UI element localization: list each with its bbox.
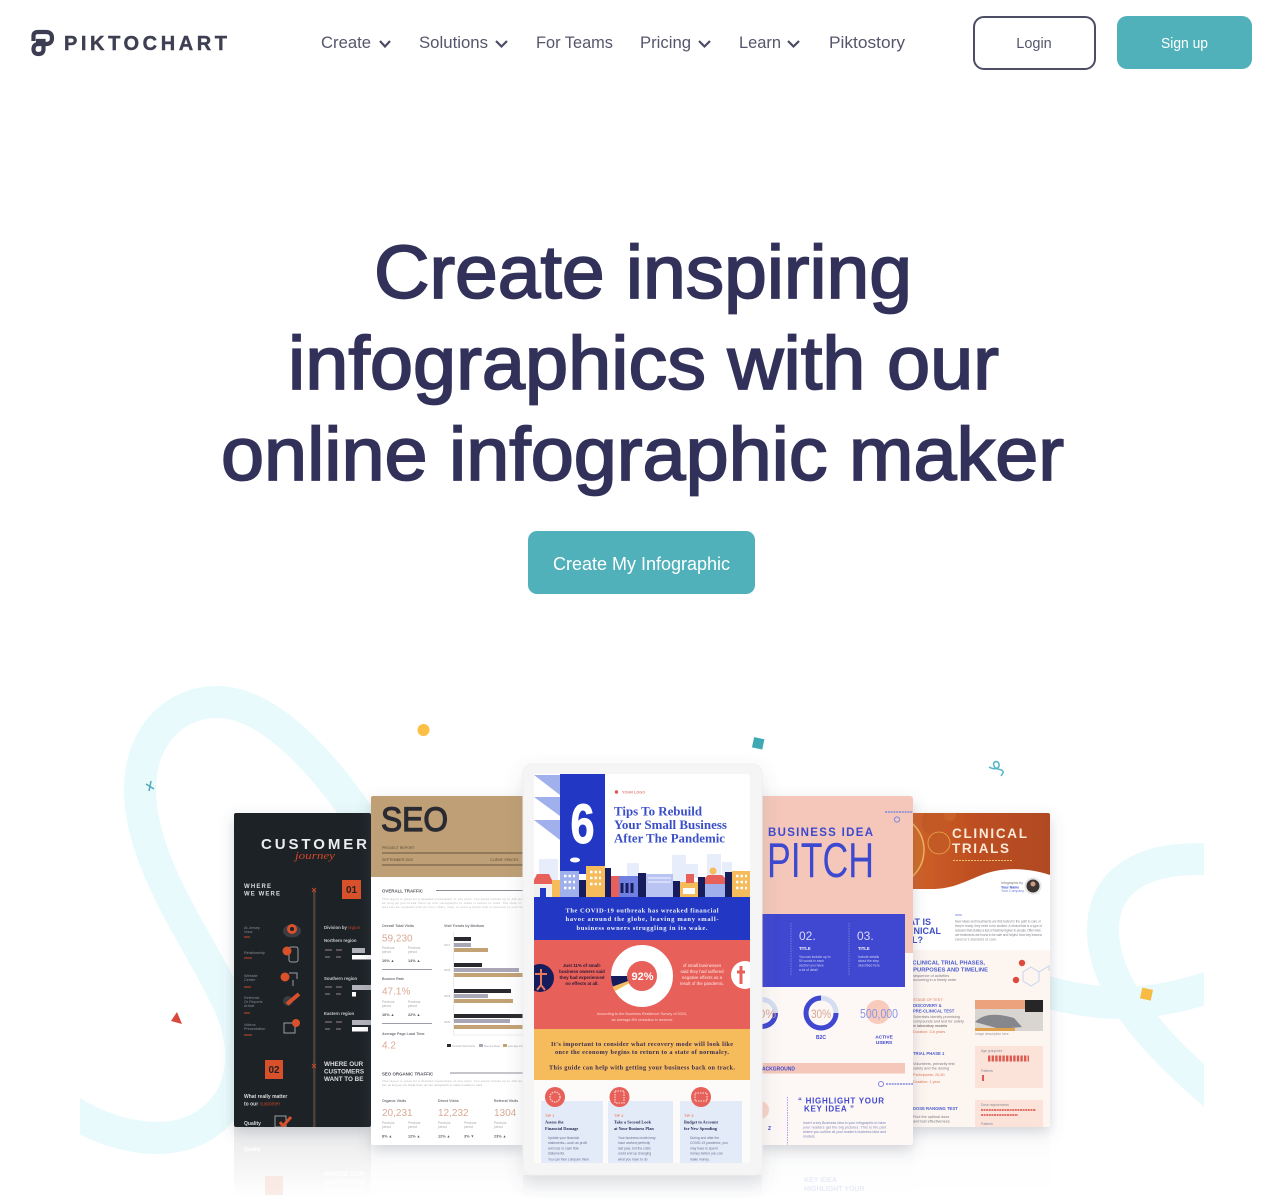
source note: According to the Business Resilience Survey of 2020, [597,1012,687,1016]
tip card 2: Take a Second Look [614,1120,652,1124]
header: tan banner: CLIENT: SPACEX [490,858,519,862]
section: yellow message [534,1029,750,1080]
panel: centre frame [523,764,762,1175]
stat: active users: 500,000 [860,1007,898,1021]
nav link: Pricing: Pricing [640,33,691,52]
section: SEO organic traffic: 1304 [494,1108,517,1119]
tip card 1: You can then compare them [548,1158,589,1162]
text: phases list: compounds and test for safety [913,1020,964,1024]
text: what really matter: Quality [244,1121,261,1127]
heading: what is a clinical trial: WHAT IS [894,917,931,927]
reflection: dark card: WANT TO BE [324,1187,365,1194]
chart legend: Average Page [508,1044,526,1048]
text: phases list: Duration: 1 year [913,1080,941,1084]
chart: dose requirements: Dose requirements [981,1103,1009,1107]
bar chart: visit trends by medium [444,924,526,1048]
section: overall traffic: as long as you break them up into paragraphs to make it easier to read. The dots in this [382,901,528,905]
tip card 3: may have to spend [690,1146,718,1150]
heading: tips to rebuild [614,804,727,846]
text: left statistic: they had experienced [560,975,605,980]
metrics: overall visits, bounce rate, load time: Previous [408,1000,421,1004]
tip card 3: money before you can [690,1152,723,1156]
logo [34,32,227,55]
title: online infographic maker [221,412,1064,496]
panel: clinical trials card [913,812,1056,1138]
nav link: For Teams: For Teams [536,33,613,52]
icon: teal plus [146,781,154,791]
text: left statistic: Just 11% of small- [563,963,602,968]
chart legend: Bounce Rate [484,1044,501,1048]
chart: participants pictogram: Patients [981,1069,993,1073]
stat: active users: USERS [876,1040,893,1046]
left accent [751,1101,771,1132]
metrics: overall visits, bounce rate, load time: Previous [382,946,395,950]
section: tip cards [534,1080,750,1163]
tip card 1: statements. [548,1152,565,1156]
heading: where we were: WHERE [244,884,271,890]
text: left statistic [559,963,605,986]
text: phases list: sequence of activities [913,974,949,978]
metrics: overall visits, bounce rate, load time: Bounce Rate [382,977,404,981]
badge: 02: 02 [268,1065,280,1076]
banner triangles [534,775,560,840]
chart: left donut: 30% [752,1007,776,1021]
section: intro [534,897,750,940]
section: SEO organic traffic: 20,231 [382,1108,413,1119]
tip card 2: TIP 2 [614,1113,624,1118]
list: journey stages: Center [244,978,256,982]
text: left statistic: no effects at all. [565,981,599,986]
text: phases list: Duration: 3-6 years [913,1030,945,1034]
tip card 2: have worked perfectly [618,1141,650,1145]
metrics: overall visits, bounce rate, load time: period [408,950,417,954]
chart: participants pictogram: Age group/sex [981,1049,1003,1053]
tip card 1 [541,1087,603,1163]
section: SEO organic traffic: Previous [408,1121,421,1125]
author credit [1001,878,1042,894]
sign up button [1117,16,1252,69]
nav link: Create: Create [321,33,371,52]
tip card 1: and loss or cash flow [548,1146,579,1150]
metrics: overall visits, bounce rate, load time: 16% ▲ [382,1013,394,1017]
bars: regional metrics [325,948,371,1032]
text: what really matter: to our customer [244,1102,280,1108]
text: phases list: PRE-CLINICAL TEST [913,1008,955,1014]
text: division by region [324,925,361,1016]
panel: blue steps: 02. [799,929,816,943]
chart: B2C donut: 30% [811,1007,831,1021]
title: infographics with our [288,321,999,405]
list: journey stages: Website [244,974,258,978]
tip card 1: statements—such as profit [548,1141,587,1145]
text: phases list: Scientists identify promising [913,1015,960,1019]
list: journey stages: Or Reports [244,1000,263,1004]
text: division by region: Eastern region [324,1011,354,1016]
nav link: Learn: Learn [739,33,781,52]
title: Create inspiring [374,230,912,314]
quote: highlight your key idea: models. [803,1134,816,1138]
icon: molecule and virus [1013,960,1049,986]
text: description [955,915,1042,942]
author credit: Your Name [1001,886,1019,890]
tip card 2: at Your Business Plan [614,1126,654,1131]
section: SEO organic traffic [382,1072,528,1138]
icon: navy person [526,964,554,992]
source note [597,1012,687,1022]
chart: B2C donut: B2C [816,1035,826,1041]
metrics: overall visits, bounce rate, load time: Previous [382,1000,395,1004]
icon: yellow dot [418,724,430,736]
donut chart: 92 percent [619,953,665,999]
heading: where our customers want to be [324,1062,364,1081]
heading: where our customers want to be: CUSTOMERS [324,1068,364,1076]
bar chart: visit trends by medium: 2018 [444,968,451,972]
section: SEO organic traffic: 12,232 [438,1108,469,1119]
reflection: clinical card [913,1127,1050,1198]
logo tag: YOUR LOGO [622,790,645,794]
call to action button [528,531,755,594]
icon: yellow square [1140,988,1153,1001]
panel: blue steps: 03. [857,929,874,943]
text: phases list: in laboratory models [913,1024,947,1028]
text: description: research that studies a test or treatment given to people. Often here [955,928,1041,932]
list: journey stages: Article [244,1004,255,1008]
text: phases list: safety and the dosing [913,1066,949,1070]
tip card 3: make money. [690,1158,710,1162]
metrics: overall visits, bounce rate, load time: Previous [408,946,421,950]
quote: highlight your key idea: where you outline all your reader's business idea and [803,1130,886,1134]
pale skyline [539,854,732,897]
panel: blue steps: 50 words in each [799,959,824,963]
icon: white person [731,961,759,989]
quote: highlight your key idea: Insert a key Business idea in your infographic to have [803,1121,886,1125]
panel: blue steps: Include details [858,955,879,959]
heading: what is a clinical trial: CLINICAL [899,926,941,936]
text: phases list: Participants: 20-80 [913,1073,945,1077]
metrics: overall visits, bounce rate, load time: Overall Total Visits [382,924,414,928]
logo wordmark: PIKTOCHART [64,33,227,55]
heading: what is a clinical trial [913,918,941,943]
reflections beneath cards [234,1127,1050,1198]
heading: phases and timeline [913,960,988,972]
heading: customer journey: journey [293,850,335,862]
text: description: are treatments are found to be safe and helpful. New key lessons [955,933,1042,937]
panel: blue steps: TITLE [799,946,811,951]
section: SEO organic traffic: 12% ▲ [438,1134,450,1138]
reflection: dark card: WHERE OUR [324,1171,365,1178]
section: SEO organic traffic: Organic Visits [382,1099,406,1103]
call to action button: Create My Infographic [553,554,730,574]
metrics: overall visits, bounce rate, load time: period [382,950,391,954]
bar chart: visit trends by medium: Visit Trends by Medium [444,924,484,928]
text: division by region: Southern region [324,976,358,981]
text: right statistic: result of the pandemic. [680,981,724,986]
text: right statistic: negative effects as a [682,975,723,980]
heading: where we were [244,884,280,896]
tip card 3: Budget to Account [684,1120,718,1124]
section: intro: business owners struggling in its wake. [576,925,708,932]
section: SEO organic traffic: Previous [464,1121,477,1125]
section: yellow message: This guide can help with getting your business back on track. [549,1064,735,1072]
left accent: Z [768,1126,771,1132]
list: journey stages: Presentation [244,1027,265,1031]
section: intro: The COVID-19 outbreak has wreaked financial [566,908,719,914]
text: phases list: TRIAL PHASE 1 [913,1051,945,1056]
reflection: centre card [523,1175,762,1198]
text: phases list: Volunteers, primarily test [913,1062,956,1066]
quote: highlight your key idea: your readers get the big pictures. This is the part [803,1126,886,1130]
text: division by region: Division by region [324,925,361,930]
icon: quality check [275,1116,291,1127]
chart legend [447,1044,522,1048]
panel: business idea pitch card [748,796,913,1145]
metrics: overall visits, bounce rate, load time: 59,230 [382,934,413,944]
text: right statistic: said they had suffered [680,969,724,974]
tip card 1: Financial Damage [545,1126,578,1131]
header: tan banner: SEPTEMBER 2020 [382,858,413,862]
badge: 01 [342,880,361,899]
section: SEO organic traffic: 3% ▼ [464,1134,474,1138]
stat: active users: ACTIVE [875,1034,894,1040]
section: SEO organic traffic: Direct Visits [438,1099,459,1103]
city illustration [534,866,750,897]
quote: highlight your key idea: KEY IDEA ” [804,1104,854,1114]
chart: participants pictogram [975,1046,1043,1088]
section: yellow message: It's important to consider what recovery mode will look like [551,1041,733,1048]
reflection: pitch card: HIGHLIGHT YOUR [804,1186,865,1193]
banner: number six [560,774,605,874]
heading: phases and timeline: PURPOSES AND TIMELINE [913,968,988,974]
text: phases list: DOSE RANGING TEST [913,1106,958,1111]
list: journey stages: Relationship [244,951,265,955]
decorative squiggle and gear [878,812,913,1086]
chart: dose requirements: Patients [981,1122,993,1126]
header: tan banner [371,796,526,877]
tip card 2: last year, but the crisis [618,1146,651,1150]
text: phases list: and test effectiveness [913,1120,950,1124]
icon: teal squiggle [989,762,1003,776]
tip card 3: for New Spending [684,1126,718,1131]
nav link: Piktostory: Piktostory [829,33,906,52]
heading: clinical trials: TRIALS [952,841,1009,856]
section: SEO organic traffic: This layout is great for a detailed explanation of one topic. You could include up to 100 words, [382,1079,528,1083]
metrics: overall visits, bounce rate, load time: period [408,1004,417,1008]
heading: customer journey [262,839,367,862]
timeline [312,888,316,1127]
text: description: New ideas and treatments are first tested in the path to care or [955,920,1042,924]
donut chart: 92 percent: 92% [631,971,654,983]
header: tan banner: SEO [381,801,448,839]
metrics: overall visits, bounce rate, load time: 4.2 [382,1040,396,1052]
chart legend: Overall Total Visits [452,1044,476,1048]
reflection: pitch card [762,1145,913,1198]
source note: an average 8% reduction in revenue [611,1018,673,1022]
icon: piktochart logo mark [34,32,52,54]
section: SEO organic traffic: 8% ▲ [382,1134,392,1138]
text: phases list [913,974,964,1124]
section: SEO organic traffic: Previous [438,1121,451,1125]
image: lab hands photo: Image description here [975,1032,1009,1036]
metrics: overall visits, bounce rate, load time: 22% ▲ [408,1013,420,1017]
tip card 2: Your business model may [618,1136,656,1140]
list: journey stages: Videos [244,1023,256,1027]
section: SEO organic traffic: Referral Visits [494,1099,518,1103]
tip card 2: what you have to do [618,1158,648,1162]
panel: customer journey card [234,813,371,1127]
heading: business idea pitch: PITCH [767,834,874,888]
metrics: overall visits, bounce rate, load time: 14% ▲ [408,959,420,963]
text: left statistic: business owners said [559,969,605,974]
section: red statistic [526,940,759,1029]
tip card 1: Update your financial [548,1136,579,1140]
header navigation [34,16,1252,69]
section: SEO organic traffic: period [464,1125,473,1129]
heading: where our customers want to be: WHERE OUR [324,1061,364,1068]
section: SEO organic traffic: 23% ▲ [494,1134,506,1138]
panel: six tips infographic [526,774,759,1163]
reflection: dark card: Quality [244,1147,261,1153]
badge: 02 [265,1060,283,1079]
section: SEO organic traffic: 12% ▲ [408,1134,420,1138]
tip card 1: TIP 1 [545,1113,555,1118]
section: overall traffic: text can be replaced with an icon, chart, map, or even a photo that is relevant to your topic. [382,905,528,909]
section: yellow message: once the economy begins to return to a state of normalcy. [555,1049,729,1056]
text: what really matter: What really matter [244,1094,287,1100]
text: division by region: Northern region [324,938,357,943]
decorative confetti [146,724,1153,1024]
heading: tips to rebuild: After The Pandemic [614,832,725,846]
band: background heading [758,1063,905,1074]
list: journey stages [244,926,265,1035]
header: tan banner: PROJECT REPORT [382,846,415,850]
heading: business idea pitch: BUSINESS IDEA [768,827,873,839]
panel: blue steps: a lot of detail [799,968,818,972]
text: right statistic: of small businesses [683,963,722,968]
panel: blue steps [758,914,905,987]
author credit: Infographic by [1001,881,1023,885]
login button: Login [1016,36,1052,52]
quote: highlight your key idea: “ HIGHLIGHT YOUR [798,1096,884,1106]
section: SEO organic traffic: Previous [382,1121,395,1125]
section: overall traffic: This layout is great for a detailed explanation of one topic. You could include up to 100 words, [382,897,528,901]
tip card 3: TIP 3 [684,1113,694,1118]
heading: tips to rebuild: Your Small Business [614,818,727,832]
image: lab hands photo [975,1000,1043,1036]
heading: phases and timeline: CLINICAL TRIAL PHASES, [912,960,985,966]
heading: clinical trials: CLINICAL [952,826,1027,841]
reflection: SEO card [371,1145,523,1198]
quote: highlight your key idea [788,1096,886,1145]
login button [974,17,1095,69]
panel: blue steps: You can include up to [799,955,831,959]
icon: teal square [752,737,764,750]
sign up button: Sign up [1161,36,1208,52]
reflection: dark card: CUSTOMERS [324,1179,366,1186]
metrics: overall visits, bounce rate, load time: Average Page Load Time [382,1032,425,1036]
metrics: overall visits, bounce rate, load time: period [382,1004,391,1008]
panel: blue steps: section you have [799,964,824,968]
icons: journey stages [280,924,301,1033]
panel: blue steps: described here [858,964,880,968]
banner: number six: 6 [570,792,594,855]
bar chart: visit trends by medium: 2019 [444,994,451,998]
badge: 01: 01 [346,885,357,896]
section: SEO organic traffic: Previous [494,1121,507,1125]
chart: left donut [762,997,778,1029]
section: overall traffic: OVERALL TRAFFIC [382,888,424,894]
text: right statistic [680,963,724,986]
reflection: pitch card: KEY IDEA [804,1177,837,1184]
section: SEO organic traffic: period [408,1125,417,1129]
title [221,230,1064,496]
heading: clinical trials [952,826,1027,860]
tip card 1: Assess the [545,1120,564,1124]
text: description: they're ready, they need to be studied. A clinical trial is a type of [955,924,1042,928]
text: phases list: occurring in a timely order [913,978,957,982]
tip card 3: COVID-19 pandemic, you [690,1141,728,1145]
heading: where we were: WE WERE [244,892,280,898]
stat: active users [860,1000,898,1046]
heading: tips to rebuild: Tips To Rebuild [614,804,702,818]
section: intro: havoc around the globe, leaving many small- [566,916,718,923]
reflection: dark card [234,1127,371,1198]
section: SEO organic traffic: too, as long as you break them up into paragraphs to make it easier to read. [382,1083,483,1087]
glass frame [523,764,762,1175]
metrics: overall visits, bounce rate, load time: 10% ▲ [382,959,394,963]
text: phases list: DISCOVERY & [913,1003,942,1008]
icon: red triangle [171,1012,182,1024]
panel: SEO report card [371,796,528,1145]
heading: business idea pitch [768,828,873,878]
text: phases list: STAGE OF TEST [913,998,943,1002]
tip card 3: During and after the [690,1136,719,1140]
text: what really matter [244,1094,287,1127]
panel: blue steps: about the step [858,959,879,963]
tip card 3 [680,1087,742,1163]
panel: blue steps: TITLE [858,946,870,951]
text: description: science's standard of care. [955,938,997,942]
chart: B2C donut [806,998,836,1041]
heading: what is a clinical trial: TRIAL? [891,935,923,945]
background swirls [72,702,1215,1138]
band: background heading: BACKGROUND [758,1066,795,1072]
tip card 2 [608,1087,673,1163]
header: orange wave [913,813,1050,889]
heading: customer journey: CUSTOMER [261,836,367,853]
list: journey stages: At Jersey [244,926,260,930]
section: SEO organic traffic: period [494,1125,503,1129]
section: overall traffic [382,890,522,908]
section: SEO organic traffic: period [438,1125,447,1129]
list: journey stages: Referrals [244,996,260,1000]
list: journey stages: Vous [244,930,253,934]
metrics: overall visits, bounce rate, load time [382,924,432,1052]
section: SEO organic traffic: SEO ORGANIC TRAFFIC [382,1072,434,1076]
bar chart: visit trends by medium: 2017 [444,943,451,947]
metrics: overall visits, bounce rate, load time: 47.1% [382,986,410,998]
nav link: Solutions: Solutions [419,33,488,52]
tip card 2: could end up changing [618,1152,651,1156]
heading: where our customers want to be: WANT TO BE [324,1076,363,1083]
bar chart: visit trends by medium: 2020 [444,1020,451,1024]
author credit: Your Company [1001,889,1024,893]
text: phases list: Find the optimal dose [913,1115,949,1119]
chart: dose requirements [975,1100,1043,1127]
section: SEO organic traffic: period [382,1125,391,1129]
